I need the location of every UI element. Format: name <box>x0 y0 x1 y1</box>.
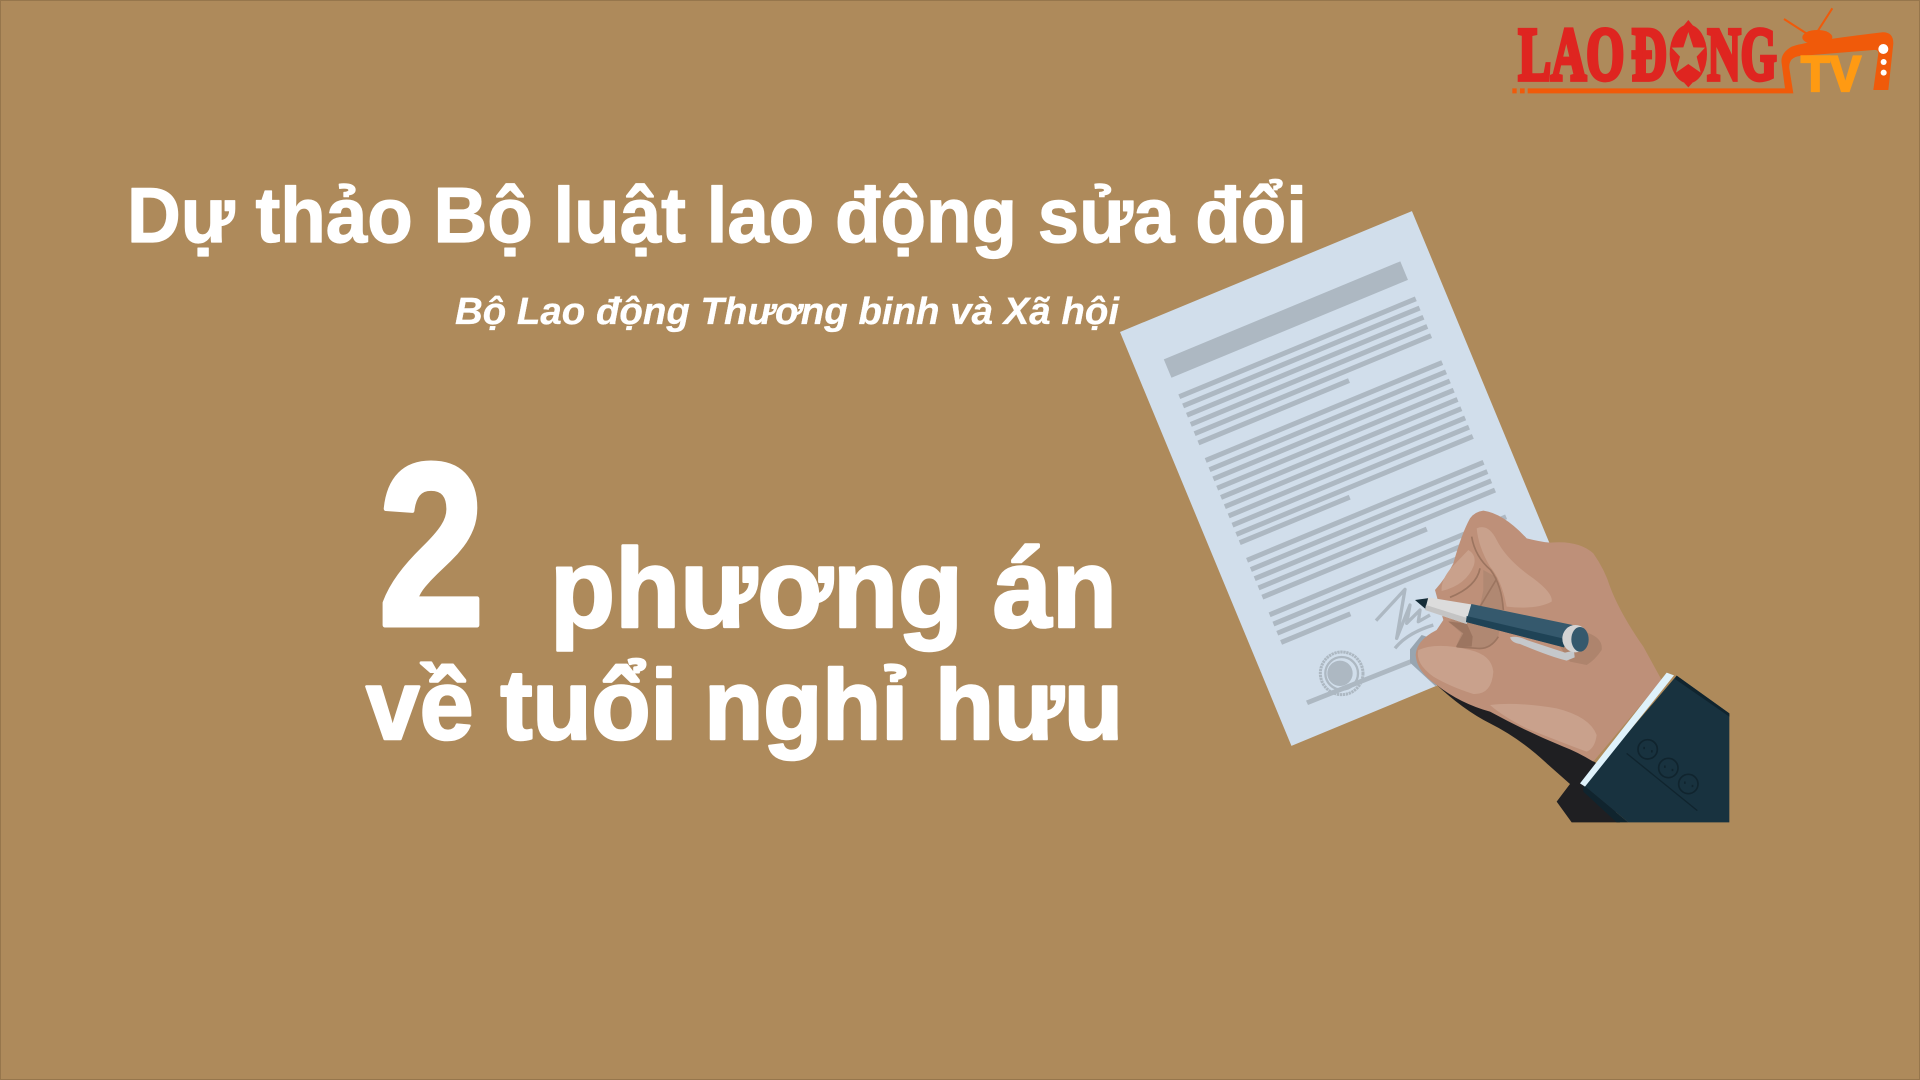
illustration: hand signing with pen <box>1306 511 1729 822</box>
logo TV set: TV <box>1801 46 1861 102</box>
title: Dự thảo Bộ luật lao động sửa đổi <box>127 171 1307 259</box>
pen clip <box>1510 637 1575 661</box>
headline: về tuổi nghỉ hưu: về tuổi nghỉ hưu <box>366 649 1123 760</box>
illustration: document <box>1120 211 1583 746</box>
sleeve buttons <box>1638 740 1698 794</box>
logo wordmark: LAO <box>1518 13 1624 96</box>
logo TV set <box>1512 8 1893 102</box>
dark undersleeve <box>1435 683 1620 822</box>
subtitle: Bộ Lao động Thương binh và Xã hội <box>455 291 1120 333</box>
logo: Lao Động TV <box>1512 8 1893 102</box>
logo star emblem <box>1670 20 1707 87</box>
signature <box>1376 589 1433 648</box>
logo wordmark: NG <box>1707 13 1777 96</box>
hand <box>1416 511 1662 762</box>
headline: phương án: phương án <box>550 526 1117 651</box>
pen <box>1415 597 1589 652</box>
jacket sleeve <box>1580 673 1729 822</box>
finger shading <box>1448 537 1602 665</box>
logo wordmark <box>1518 13 1777 96</box>
hand shadow on paper <box>1410 635 1450 686</box>
big number 2: 2 <box>378 416 485 675</box>
stamp seal <box>1306 652 1411 705</box>
hand highlights <box>1418 527 1597 752</box>
logo wordmark: Đ <box>1632 13 1667 96</box>
